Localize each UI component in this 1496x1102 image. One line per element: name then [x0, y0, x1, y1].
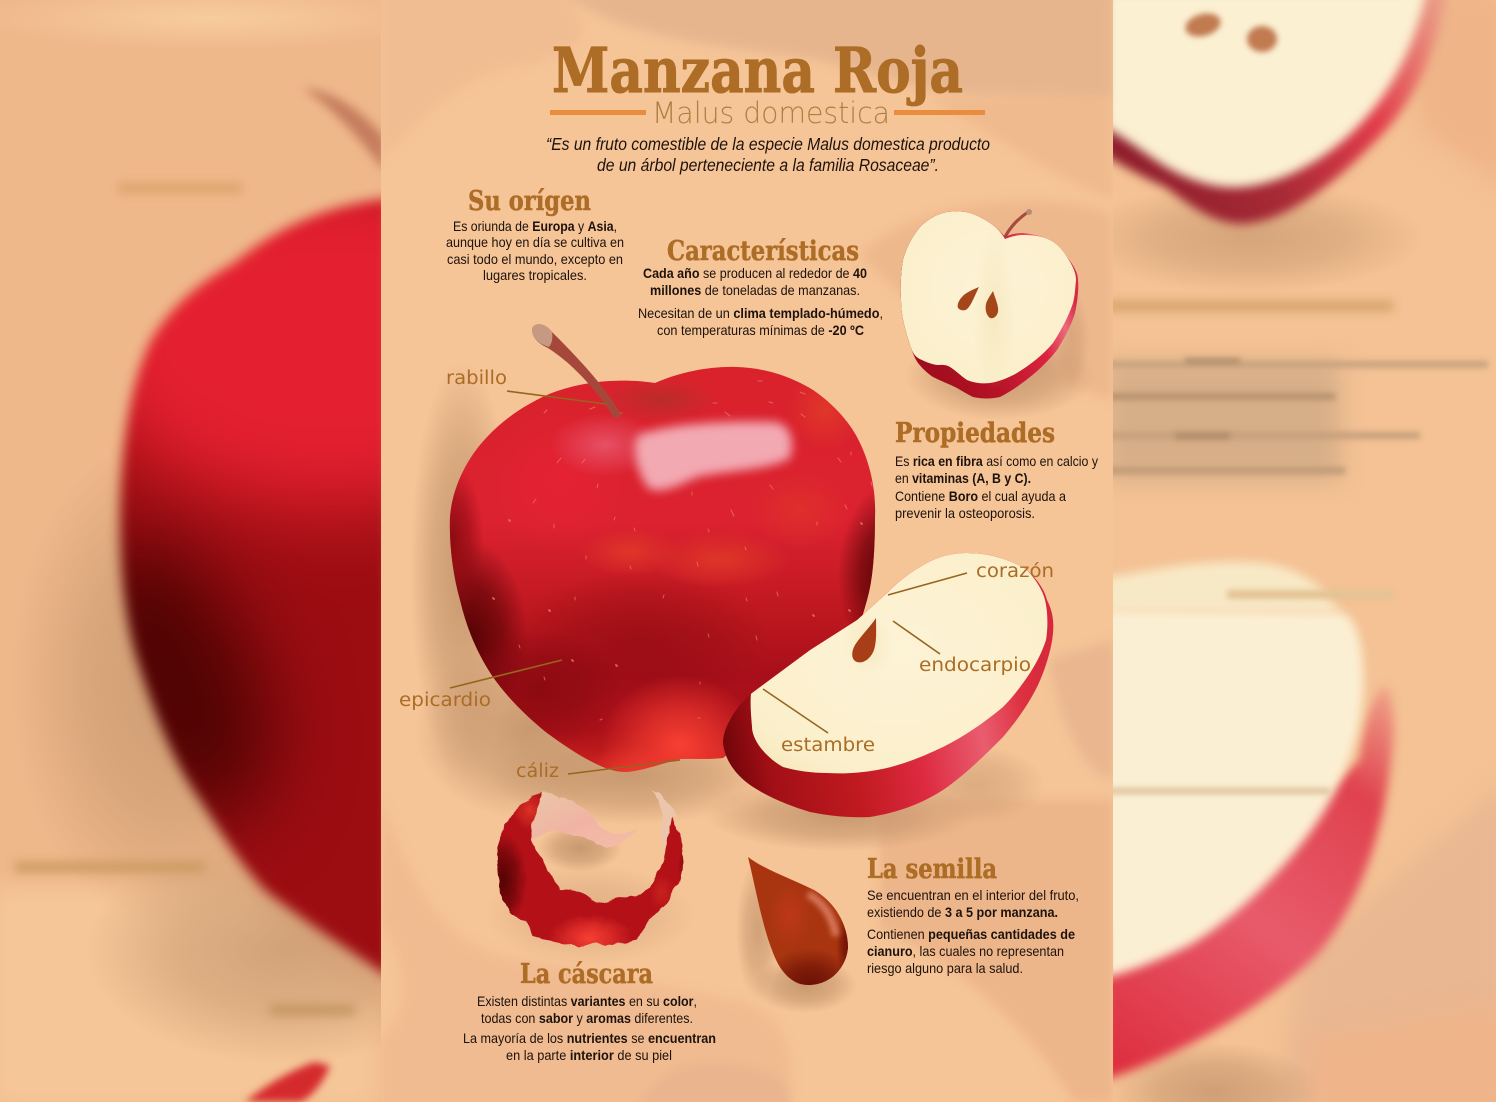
- label: estambre: estambre: [781, 735, 875, 756]
- label: endocarpio: endocarpio: [919, 655, 1031, 676]
- label: cáliz: cáliz: [516, 761, 559, 782]
- text block: La semilla: [867, 854, 1079, 976]
- label: corazón: corazón: [976, 561, 1054, 582]
- label: endocarpio: [893, 621, 1031, 676]
- text block: Propiedades: Contiene Boro el cual ayuda a: [895, 489, 1066, 504]
- definition quote: “Es un fruto comestible de la especie Malus domestica producto: [546, 134, 990, 154]
- text block: Su orígen: aunque hoy en día se cultiva en: [446, 235, 624, 250]
- text block: Su orígen: casi todo el mundo, excepto en: [447, 252, 623, 267]
- text block: Propiedades: Es rica en fibra así como en calcio y: [895, 454, 1098, 469]
- brush texture patches: [381, 0, 1113, 1102]
- seed in slice: [852, 618, 876, 662]
- illustration: apple slice: [705, 553, 1053, 851]
- seeds in halved apple: [958, 287, 998, 318]
- label: rabillo: [446, 368, 606, 404]
- blurred background: left: [0, 0, 381, 1102]
- text block: Propiedades: [895, 418, 1098, 521]
- label: epicardio: epicardio: [399, 690, 491, 711]
- subtitle with rules: Malus domestica: [652, 96, 890, 130]
- illustration: apple peel: [497, 790, 684, 950]
- text block: Su orígen: lugares tropicales.: [483, 268, 587, 283]
- title text: Manzana Roja: [552, 34, 963, 107]
- subtitle with rules: [550, 96, 985, 130]
- text block: Propiedades: Propiedades: [895, 418, 1055, 449]
- text block: Características: [638, 236, 883, 338]
- label: estambre: [763, 689, 875, 756]
- text block: Características: con temperaturas mínimas de -20 ºC: [657, 323, 864, 338]
- text block: La cáscara: en la parte interior de su piel: [506, 1048, 672, 1063]
- text block: La cáscara: todas con sabor y aromas diferentes.: [481, 1011, 693, 1026]
- text block: Propiedades: prevenir la osteoporosis.: [895, 506, 1035, 521]
- apple stem: [532, 324, 622, 418]
- definition quote: [546, 134, 990, 175]
- definition quote: de un árbol perteneciente a la familia Rosaceae”.: [597, 155, 939, 175]
- text block: Características: Necesitan de un clima templado-húmedo,: [638, 306, 883, 321]
- illustration: whole red apple: [417, 324, 876, 818]
- text block: Características: Cada año se producen al rededor de 40: [643, 266, 867, 281]
- text block: La semilla: existiendo de 3 a 5 por manzana.: [867, 905, 1058, 920]
- text block: La cáscara: La cáscara: [520, 959, 653, 990]
- label: rabillo: rabillo: [446, 368, 507, 389]
- label: corazón: [888, 561, 1054, 595]
- label: epicardio: [399, 660, 562, 711]
- illustration: halved apple: [901, 209, 1095, 420]
- text block: La cáscara: Existen distintas variantes en su color,: [477, 994, 697, 1009]
- blurred background: right: [1075, 0, 1496, 1102]
- slice flesh: [751, 553, 1047, 773]
- text block: La cáscara: [463, 959, 716, 1063]
- label: cáliz: [516, 760, 680, 782]
- text block: La semilla: Se encuentran en el interior del fruto,: [867, 888, 1079, 903]
- text block: La semilla: Contienen pequeñas cantidades de: [867, 927, 1075, 942]
- text block: Características: Características: [667, 236, 859, 267]
- text block: Características: millones de toneladas de manzanas.: [650, 283, 860, 298]
- text block: Su orígen: Es oriunda de Europa y Asia,: [453, 219, 617, 234]
- illustration: apple seed: [740, 857, 850, 1010]
- text block: Propiedades: en vitaminas (A, B y C).: [895, 471, 1031, 486]
- text block: La semilla: La semilla: [867, 854, 997, 885]
- text block: La semilla: cianuro, las cuales no representan: [867, 944, 1064, 959]
- text block: Su orígen: Su orígen: [468, 186, 591, 217]
- text block: La semilla: riesgo alguno para la salud.: [867, 961, 1023, 976]
- text block: Su orígen: [446, 186, 624, 283]
- blurred apple: [110, 190, 381, 982]
- cream flesh: [901, 211, 1076, 383]
- main poster panel: [381, 0, 1113, 1102]
- peel inner pale side: [530, 790, 678, 852]
- text block: La cáscara: La mayoría de los nutrientes se encuentran: [463, 1031, 716, 1046]
- skin speckles: [493, 381, 872, 720]
